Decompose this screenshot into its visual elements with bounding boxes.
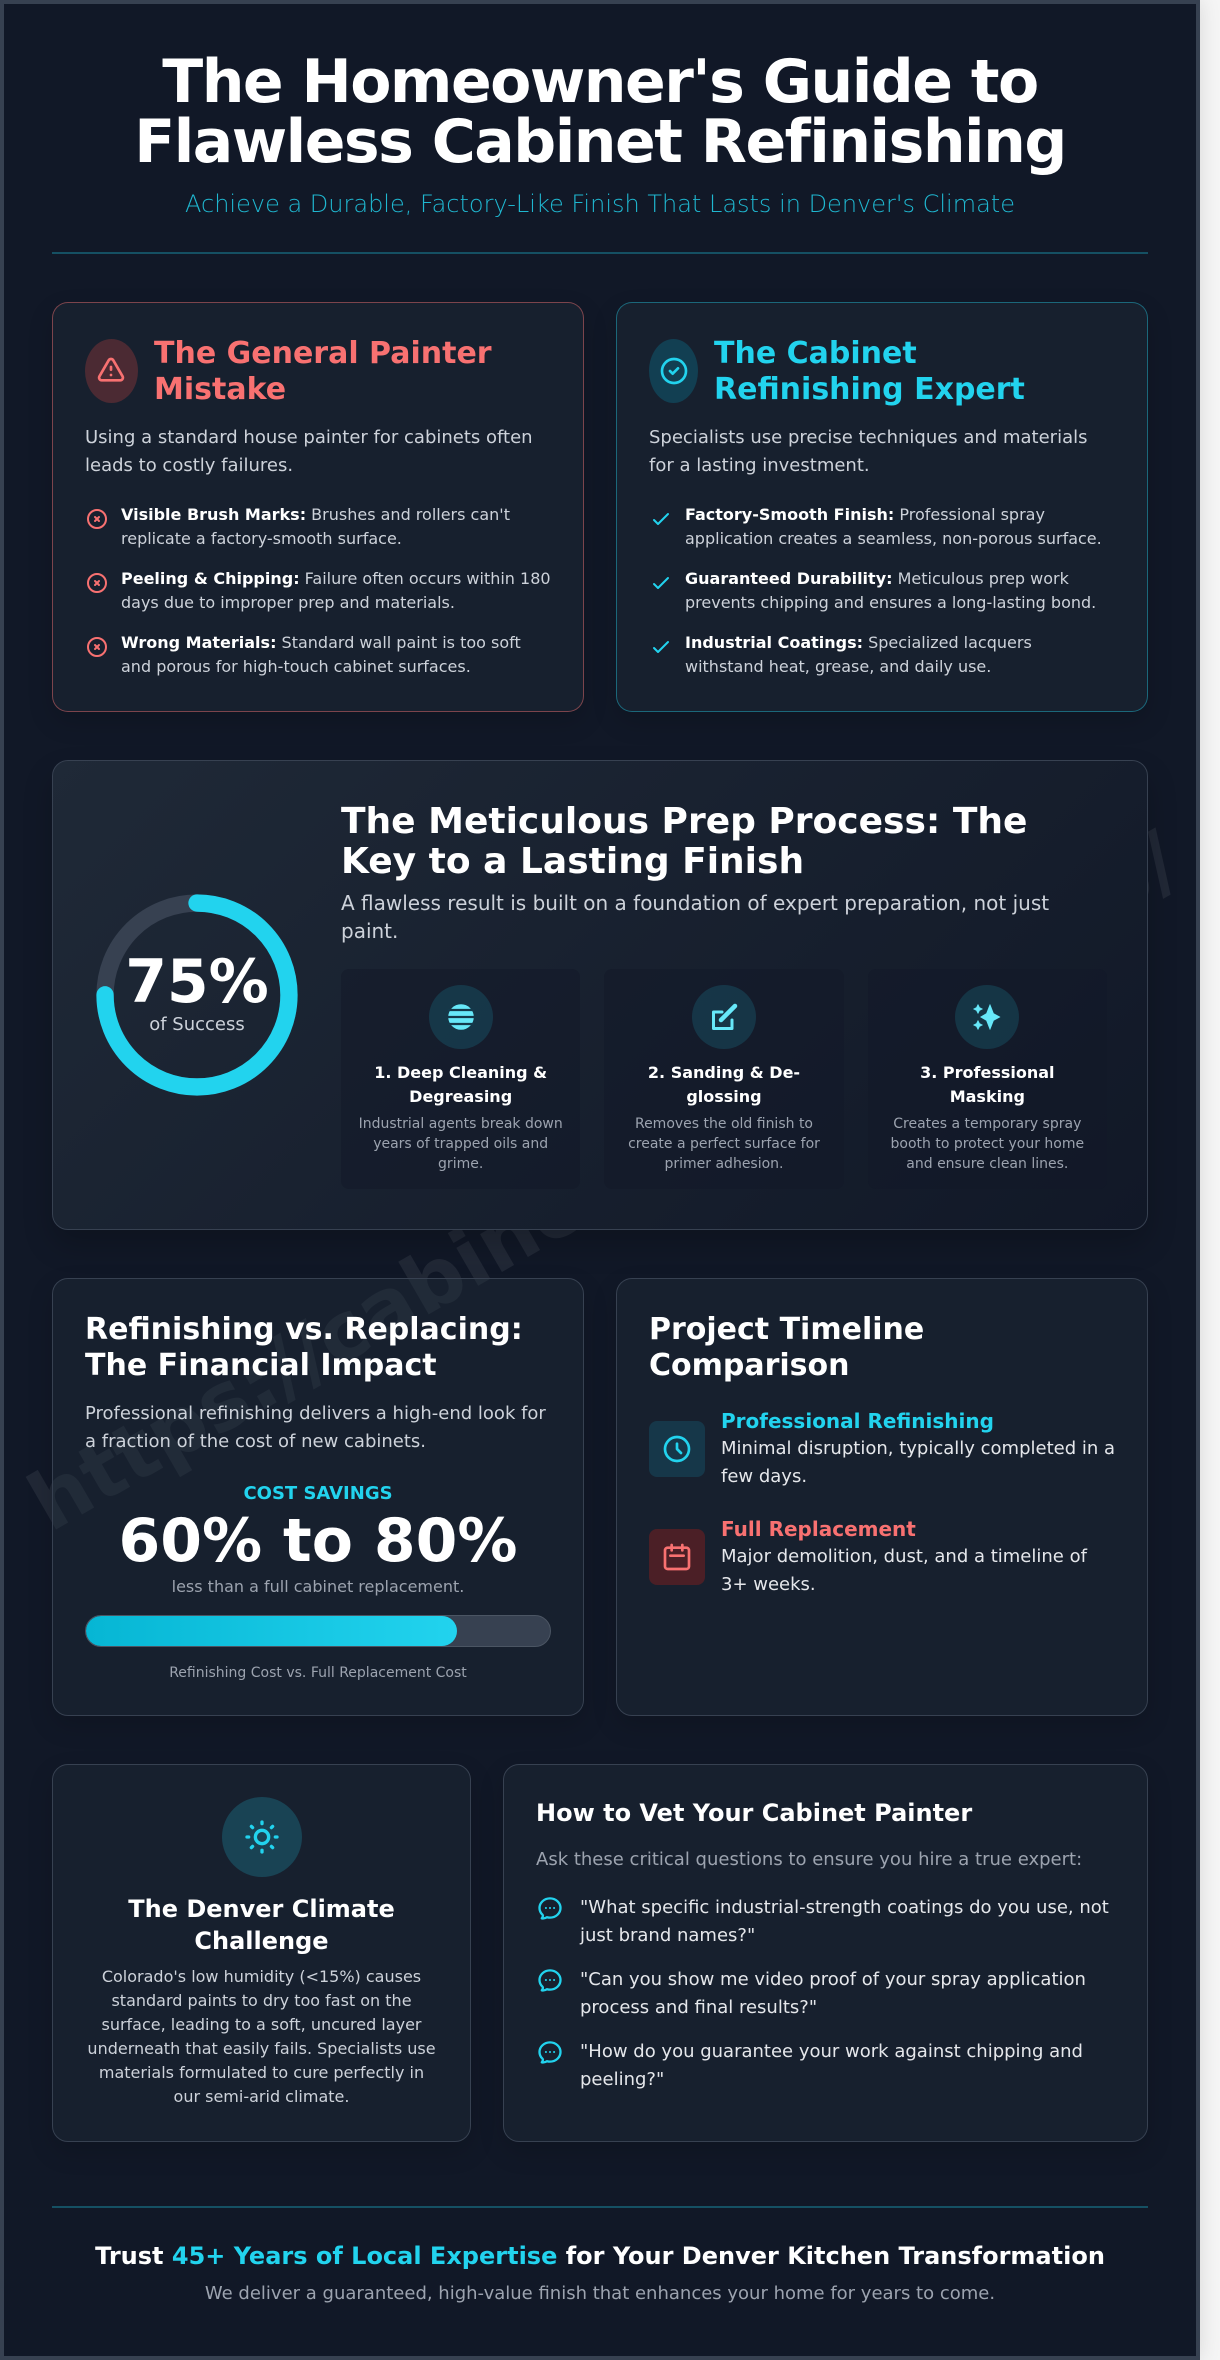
row text xyxy=(721,1517,1088,1595)
footer xyxy=(95,2242,1105,2304)
footer headline: Trust 45+ Years of Local Expertise for Your Denver Kitchen Transformation xyxy=(95,2242,1105,2270)
heading text: Refinishing Expert xyxy=(714,372,1025,407)
intro text: Using a standard house painter for cabinets often xyxy=(85,427,533,448)
heading text: The Cabinet xyxy=(714,336,917,371)
body text: our semi-arid climate. xyxy=(174,2087,349,2106)
intro text: Professional refinishing delivers a high-end look for xyxy=(85,1403,546,1424)
item: brush marks: replicate a factory-smooth surface. xyxy=(121,529,402,548)
full replacement row xyxy=(649,1517,1088,1595)
icon: cleaning xyxy=(429,985,493,1049)
body text: Colorado's low humidity (<15%) causes xyxy=(102,1967,421,1986)
icon: clock xyxy=(649,1421,705,1477)
title xyxy=(134,47,1066,177)
cost savings stat: 60% to 80% xyxy=(119,1506,517,1576)
heading text: The General Painter xyxy=(154,336,492,371)
step 1: deep cleaning: 1. Deep Cleaning & xyxy=(374,1063,547,1082)
step 2: sanding: Removes the old finish to xyxy=(635,1116,813,1132)
question 1: just brand names?" xyxy=(580,1925,755,1946)
panel: prep process xyxy=(52,760,1148,1230)
heading text xyxy=(714,336,1025,407)
panel: denver climate xyxy=(52,1764,471,2142)
heading: How to Vet Your Cabinet Painter xyxy=(536,1799,972,1827)
icon: calendar xyxy=(649,1529,705,1585)
donut chart: 75% of success xyxy=(96,894,298,1096)
intro text: Ask these critical questions to ensure you hire a true expert: xyxy=(536,1849,1082,1870)
title: Flawless Cabinet Refinishing xyxy=(134,107,1066,177)
question 1 xyxy=(538,1897,1109,1946)
item: wrong materials: Wrong Materials: Standard wall paint is too soft xyxy=(121,633,521,652)
progress bar xyxy=(85,1615,551,1647)
row text: Full Replacement xyxy=(721,1517,916,1541)
heading: Challenge xyxy=(194,1927,329,1955)
intro text xyxy=(85,1403,546,1452)
prep intro: paint. xyxy=(341,919,398,943)
panel: financial impact xyxy=(52,1278,584,1716)
step 3: masking: Creates a temporary spray xyxy=(893,1116,1081,1132)
item: wrong materials: and porous for high-touch cabinet surfaces. xyxy=(121,657,471,676)
item: brush marks xyxy=(87,505,510,548)
item: brush marks: Visible Brush Marks: Brushes and rollers can't xyxy=(121,505,510,524)
question 1: "What specific industrial-strength coatings do you use, not xyxy=(580,1897,1109,1918)
panel: vet your painter xyxy=(503,1764,1148,2142)
step 3: masking xyxy=(868,969,1107,1189)
question 2 xyxy=(538,1969,1086,2018)
icon: check circle xyxy=(649,339,698,403)
intro text xyxy=(85,427,533,476)
panel heading xyxy=(85,336,492,407)
question 2: "Can you show me video proof of your spray application xyxy=(580,1969,1086,1990)
step 1: deep cleaning: Degreasing xyxy=(409,1087,512,1106)
prep intro xyxy=(341,891,1049,943)
panel heading xyxy=(649,336,1025,407)
row text: Professional Refinishing xyxy=(721,1409,994,1433)
title: The Homeowner's Guide to xyxy=(162,47,1038,117)
step 2: sanding: create a perfect surface for xyxy=(628,1136,820,1152)
header xyxy=(134,47,1066,218)
donut chart: 75% of success: of Success xyxy=(149,1014,245,1035)
icon: pencil square xyxy=(692,985,756,1049)
item: durability: Guaranteed Durability: Meticulous prep work xyxy=(685,569,1069,588)
donut chart: 75% of success: 75% xyxy=(125,947,269,1017)
step 1: deep cleaning: years of trapped oils and xyxy=(373,1136,548,1152)
item: peeling xyxy=(87,569,551,612)
prep heading xyxy=(341,801,1027,882)
step 2: sanding: 2. Sanding & De- xyxy=(648,1063,800,1082)
item: factory smooth xyxy=(653,505,1102,548)
item: wrong materials xyxy=(87,633,521,676)
heading xyxy=(649,1312,924,1383)
item: factory smooth: Factory-Smooth Finish: Professional spray xyxy=(685,505,1045,524)
watermark: https://cabinetrefinishing.co/ xyxy=(13,814,1194,1549)
row text: 3+ weeks. xyxy=(721,1574,816,1595)
icon: sun xyxy=(222,1797,302,1877)
subtitle: Achieve a Durable, Factory-Like Finish That Lasts in Denver's Climate xyxy=(185,190,1015,218)
step 2: sanding: primer adhesion. xyxy=(664,1156,784,1172)
step 2: sanding: glossing xyxy=(686,1087,762,1106)
heading: The Financial Impact xyxy=(85,1348,437,1383)
step 3: masking: and ensure clean lines. xyxy=(906,1156,1068,1172)
icon: sparkles xyxy=(955,985,1019,1049)
intro text: for a lasting investment. xyxy=(649,455,870,476)
step 2: sanding xyxy=(604,969,844,1189)
prep heading: The Meticulous Prep Process: The xyxy=(341,801,1027,842)
body text: surface, leading to a soft, uncured layer xyxy=(101,2015,422,2034)
heading text xyxy=(154,336,492,407)
intro text: leads to costly failures. xyxy=(85,455,293,476)
item: coatings xyxy=(653,633,1032,676)
item: factory smooth: application creates a seamless, non-porous surface. xyxy=(685,529,1102,548)
body text xyxy=(87,1967,436,2106)
question 3: "How do you guarantee your work against chipping and xyxy=(580,2041,1083,2062)
question 3 xyxy=(538,2041,1083,2090)
item: durability: prevents chipping and ensures a long-lasting bond. xyxy=(685,593,1096,612)
question 2: process and final results?" xyxy=(580,1997,817,2018)
body text: standard paints to dry too fast on the xyxy=(111,1991,412,2010)
heading: Project Timeline xyxy=(649,1312,924,1347)
heading: Comparison xyxy=(649,1348,850,1383)
intro text xyxy=(649,427,1088,476)
row text xyxy=(721,1409,1115,1487)
step 3: masking: 3. Professional xyxy=(920,1063,1055,1082)
intro text: a fraction of the cost of new cabinets. xyxy=(85,1431,426,1452)
icon: warning triangle xyxy=(85,339,138,403)
heading: The Denver Climate xyxy=(128,1895,395,1923)
intro text: Specialists use precise techniques and materials xyxy=(649,427,1088,448)
heading xyxy=(85,1312,523,1383)
item: coatings: withstand heat, grease, and daily use. xyxy=(685,657,991,676)
panel: general painter mistake xyxy=(52,302,584,712)
item: coatings: Industrial Coatings: Specialized lacquers xyxy=(685,633,1032,652)
item: peeling: days due to improper prep and materials. xyxy=(121,593,455,612)
heading: Refinishing vs. Replacing: xyxy=(85,1312,523,1347)
cost savings stat xyxy=(119,1483,517,1596)
item: peeling: Peeling & Chipping: Failure often occurs within 180 xyxy=(121,569,551,588)
prep heading: Key to a Lasting Finish xyxy=(341,841,804,882)
body text: materials formulated to cure perfectly in xyxy=(99,2063,424,2082)
panel: project timeline xyxy=(616,1278,1148,1716)
body text: underneath that easily fails. Specialists use xyxy=(87,2039,436,2058)
step 1: deep cleaning: Industrial agents break down xyxy=(359,1116,563,1132)
panel: cabinet refinishing expert xyxy=(616,302,1148,712)
footer subline: We deliver a guaranteed, high-value finish that enhances your home for years to come. xyxy=(205,2283,995,2304)
step 3: masking: Masking xyxy=(950,1087,1025,1106)
professional refinishing row xyxy=(649,1409,1115,1487)
row text: Minimal disruption, typically completed in a xyxy=(721,1438,1115,1459)
bar caption: Refinishing Cost vs. Full Replacement Cost xyxy=(169,1665,467,1681)
heading text: Mistake xyxy=(154,372,286,407)
prep intro: A flawless result is built on a foundation of expert preparation, not just xyxy=(341,891,1049,915)
row text: Major demolition, dust, and a timeline of xyxy=(721,1546,1087,1567)
item: durability xyxy=(653,569,1096,612)
question 3: peeling?" xyxy=(580,2069,664,2090)
cost savings stat: COST SAVINGS xyxy=(243,1483,393,1504)
heading xyxy=(128,1895,395,1955)
step 1: deep cleaning: grime. xyxy=(438,1156,483,1172)
cost savings stat: less than a full cabinet replacement. xyxy=(172,1577,464,1596)
step 1: deep cleaning xyxy=(341,969,580,1189)
row text: few days. xyxy=(721,1466,807,1487)
step 3: masking: booth to protect your home xyxy=(891,1136,1084,1152)
